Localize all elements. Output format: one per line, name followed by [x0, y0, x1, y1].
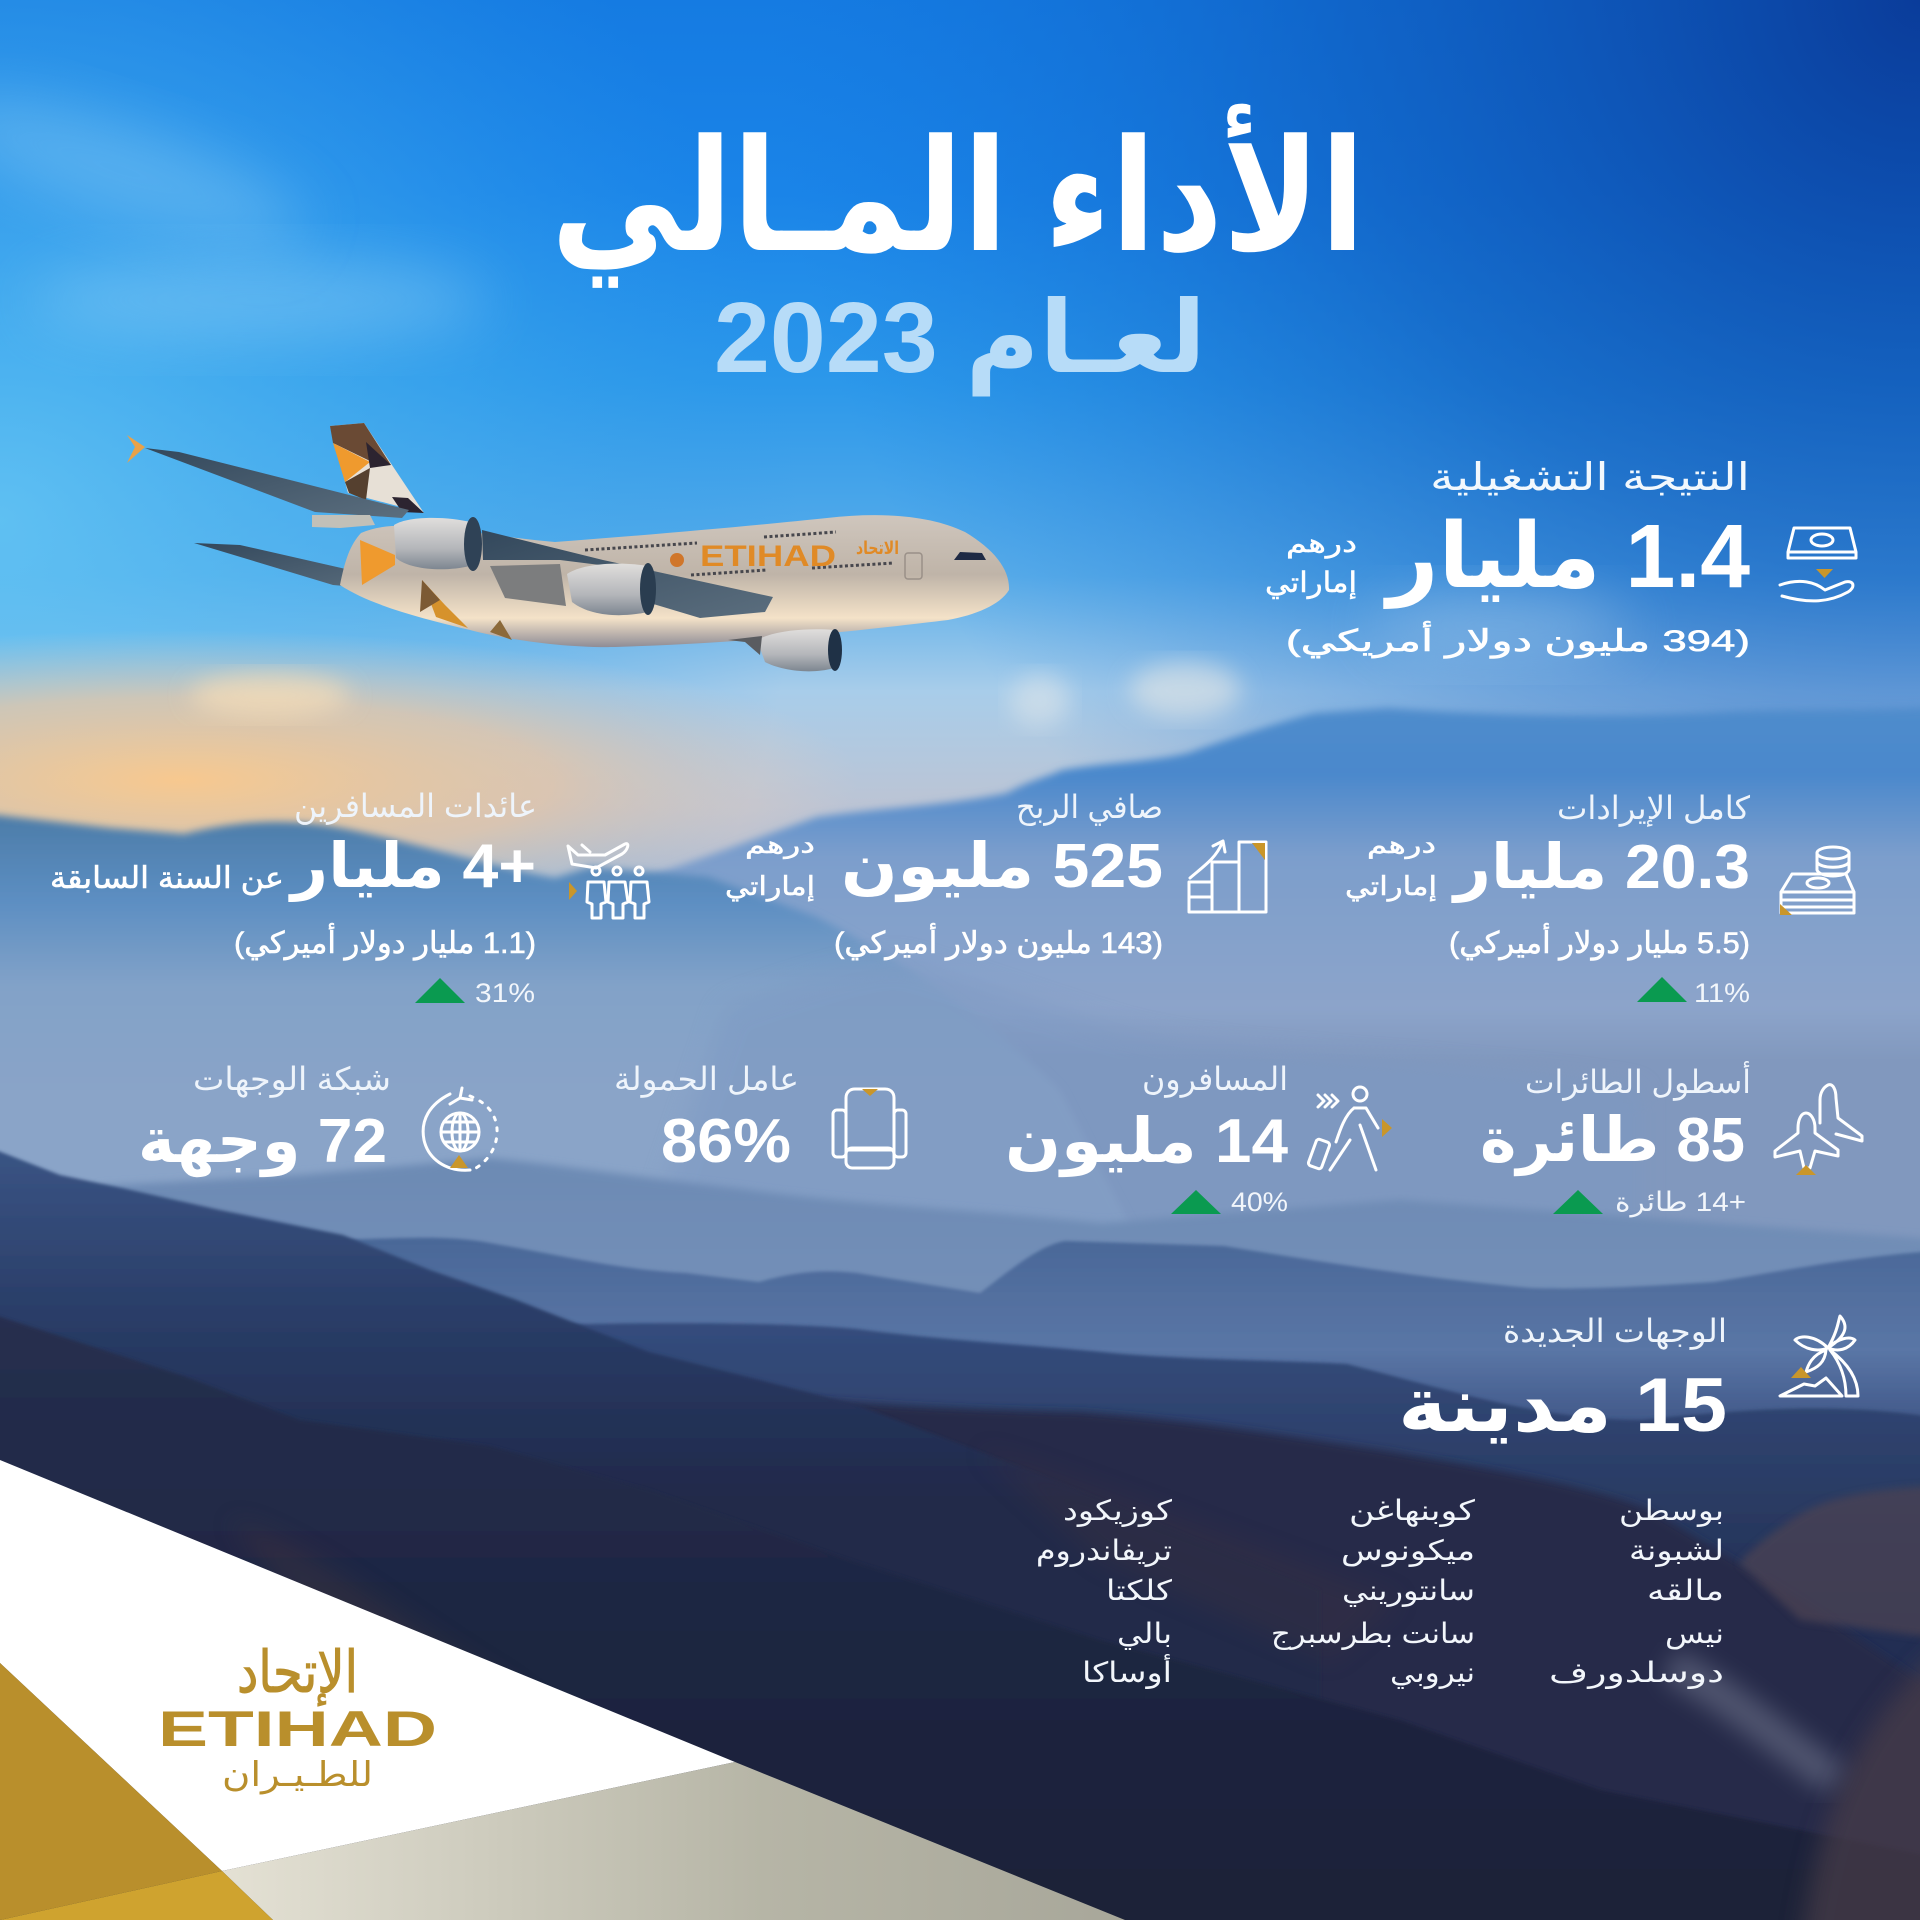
- panel: total revenue: 11%: [1694, 978, 1750, 1008]
- city list: column 1: بوسطن: [1619, 1495, 1724, 1527]
- logo panel: white, gold and grey corner shapes: [0, 1460, 1125, 1920]
- panel: load factor: 86%: [661, 1107, 791, 1176]
- Etihad logo: [158, 1640, 437, 1795]
- panel: load factor: عامل الحمولة: [614, 1061, 799, 1098]
- airplane illustration: [127, 423, 1009, 671]
- title: الأداء المـالي: [551, 103, 1365, 288]
- panel: total revenue: درهم: [1367, 832, 1436, 859]
- panel: passenger revenue: (1.1 مليار دولار أميركي): [234, 922, 536, 961]
- city list: column 1: [1549, 1495, 1724, 1689]
- city list: column 1: مالقه: [1647, 1575, 1724, 1606]
- panel: fleet: 85 طائرة: [1480, 1106, 1745, 1176]
- subtitle: لعـام 2023: [714, 282, 1206, 396]
- panel: fleet: [1480, 1061, 1862, 1218]
- city list: column 3: تريفاندروم: [1036, 1535, 1172, 1567]
- panel: passengers: 40%: [1231, 1187, 1288, 1217]
- city list: column 2: سانتوريني: [1342, 1575, 1475, 1607]
- panel: total revenue: 20.3 مليار: [1451, 833, 1750, 903]
- panel: new destinations: 15 مدينة: [1398, 1363, 1727, 1448]
- panel: fleet: أسطول الطائرات: [1525, 1061, 1751, 1101]
- panel: network: شبكة الوجهات: [193, 1061, 391, 1098]
- panel: net profit: 525 مليون: [841, 832, 1163, 902]
- city list: column 2: [1271, 1495, 1476, 1689]
- icon: cash and coins: [1780, 847, 1854, 915]
- panel: new destinations: الوجهات الجديدة: [1503, 1313, 1727, 1350]
- panel: total revenue: كامل الإيرادات: [1557, 790, 1751, 827]
- panel: passenger revenue: +4 مليار: [288, 832, 536, 902]
- panel: net profit: (143 مليون دولار أميركي): [834, 922, 1163, 961]
- panel: operating result: (394 مليون دولار أمريكي): [1286, 620, 1750, 659]
- panel: passenger revenue: عن السنة السابقة: [50, 862, 284, 895]
- panel: net profit: [725, 789, 1266, 961]
- icon: growth bars: [1189, 841, 1266, 912]
- city list: column 2: كوبنهاغن: [1349, 1495, 1476, 1527]
- city list: column 1: لشبونة: [1629, 1535, 1724, 1567]
- panel: operating result: [1265, 457, 1856, 659]
- city list: column 2: نيروبي: [1390, 1657, 1475, 1689]
- panel: passenger revenue: [50, 788, 649, 1008]
- icon: walking traveller: [1308, 1087, 1392, 1170]
- icon: money in hand: [1780, 528, 1856, 601]
- panel: total revenue: (5.5 مليار دولار أميركي): [1449, 922, 1750, 961]
- icon: palm tree and pyramid: [1780, 1316, 1858, 1396]
- city list: column 3: بالي: [1117, 1618, 1172, 1650]
- panel: operating result: 1.4 مليار: [1383, 507, 1750, 609]
- city list: column 3: [1036, 1495, 1173, 1689]
- city list: column 1: نيس: [1665, 1618, 1724, 1650]
- panel: passenger revenue: 31%: [475, 978, 535, 1008]
- city list: column 3: أوساكا: [1082, 1653, 1172, 1689]
- panel: passengers: 14 مليون: [1005, 1107, 1289, 1177]
- airplane illustration: الاتحاد: [856, 538, 899, 558]
- city list: column 1: دوسلدورف: [1549, 1657, 1724, 1689]
- Etihad logo: ETIHAD: [158, 1701, 437, 1757]
- panel: load factor: [614, 1061, 906, 1176]
- panel: passengers: المسافرون: [1142, 1061, 1288, 1098]
- Etihad logo: للطـيـران: [222, 1756, 373, 1795]
- icon: plane and passengers: [568, 844, 649, 918]
- city list: column 2: ميكونوس: [1341, 1535, 1475, 1567]
- icon: two planes: [1775, 1085, 1862, 1175]
- panel: total revenue: [1345, 790, 1854, 1008]
- city list: column 3: كوزيكود: [1063, 1495, 1173, 1527]
- panel: net profit: درهم: [745, 832, 815, 859]
- icon: globe with plane: [423, 1088, 497, 1170]
- city list: column 3: كلكتا: [1106, 1575, 1173, 1606]
- panel: operating result: النتيجة التشغيلية: [1430, 457, 1750, 499]
- panel: network: [138, 1061, 497, 1177]
- airplane illustration: ETIHAD: [700, 540, 836, 573]
- panel: new destinations: [1398, 1313, 1858, 1448]
- Etihad logo: الإتحاد: [237, 1640, 358, 1707]
- city list: column 2: سانت بطرسبرج: [1271, 1618, 1475, 1651]
- panel: fleet: +14 طائرة: [1615, 1187, 1746, 1218]
- panel: passengers: [1005, 1061, 1392, 1217]
- panel: operating result: درهم: [1286, 528, 1357, 559]
- panel: total revenue: إماراتي: [1345, 871, 1437, 902]
- panel: net profit: إماراتي: [725, 871, 815, 902]
- panel: net profit: صافي الربح: [1016, 789, 1163, 826]
- panel: operating result: إماراتي: [1265, 567, 1357, 599]
- panel: passenger revenue: عائدات المسافرين: [294, 788, 537, 825]
- panel: network: 72 وجهة: [138, 1107, 387, 1177]
- icon: seat: [833, 1089, 906, 1168]
